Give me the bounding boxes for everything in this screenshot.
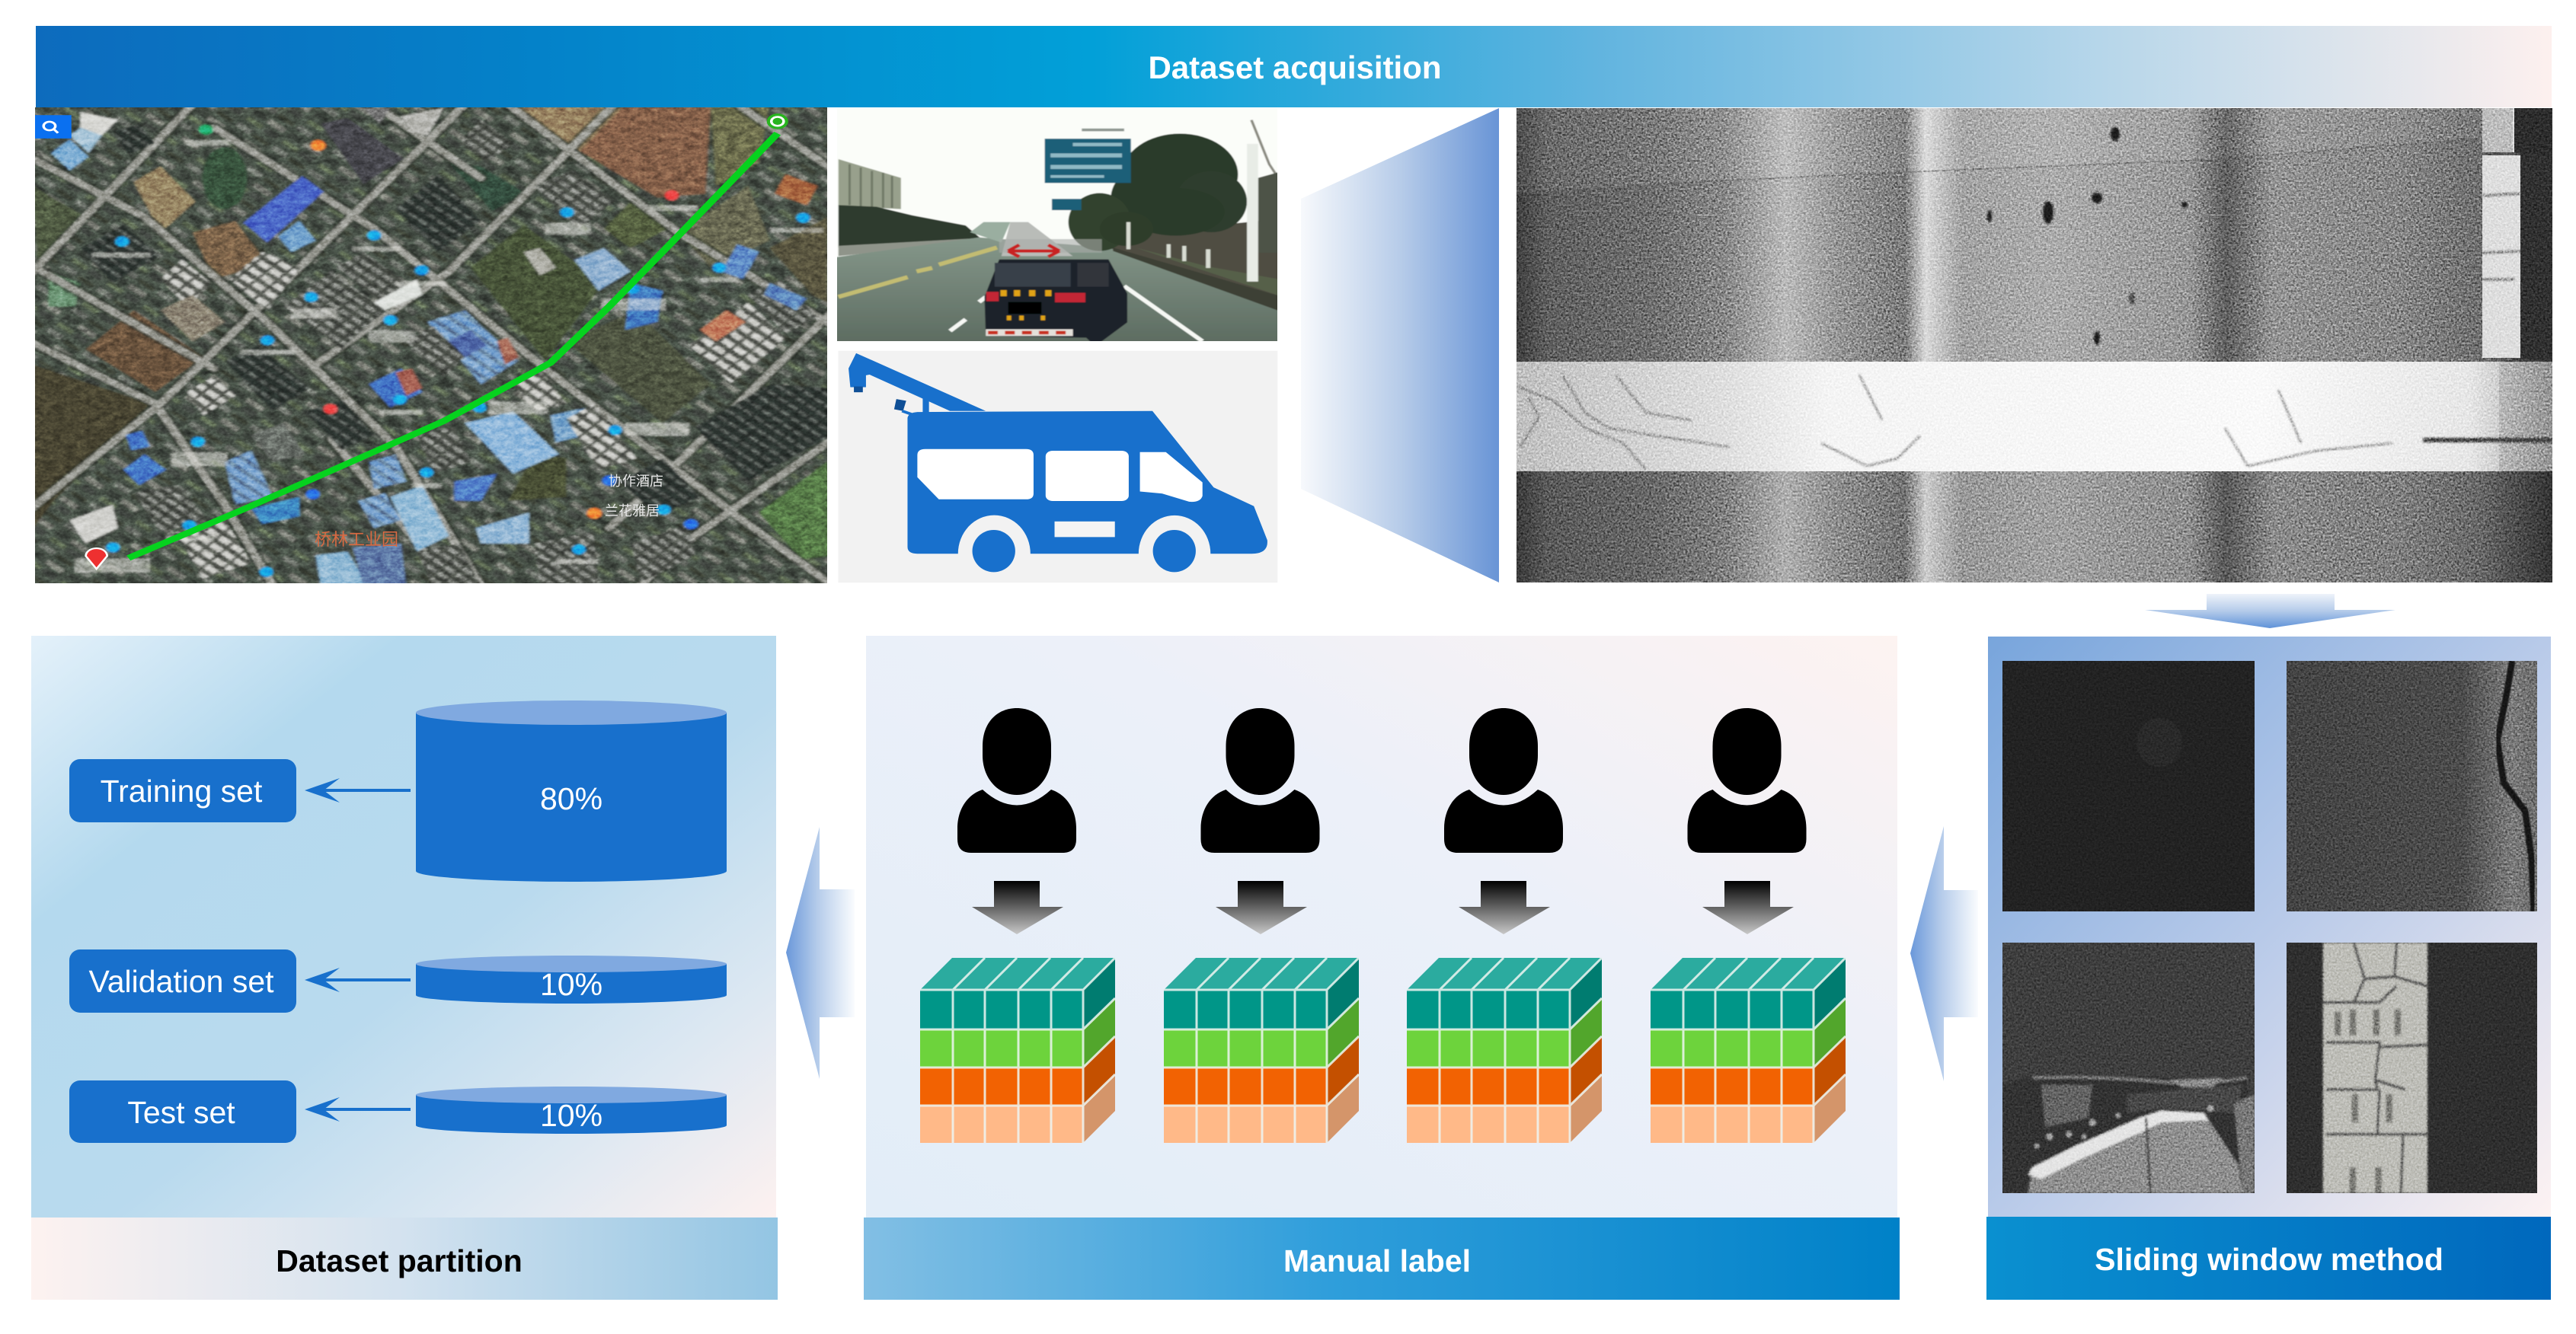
image patch: pavement with crack at right edge xyxy=(2287,661,2537,911)
arrow: to training set xyxy=(305,778,411,803)
annotator 4 with arrow and label cube xyxy=(1651,708,1846,1143)
map place labels: 协作酒店 xyxy=(609,474,663,489)
panel: dataset partition xyxy=(31,636,778,1300)
label: training set: Training set xyxy=(101,774,263,809)
label: validation set xyxy=(69,949,296,1013)
arrow: to validation set xyxy=(305,968,411,992)
image patch: cracked lane marking xyxy=(2287,943,2537,1193)
annotator 3 with arrow and label cube xyxy=(1407,708,1602,1143)
image patch: pothole with broken slab xyxy=(2002,943,2255,1193)
footer: manual label xyxy=(864,1218,1900,1300)
cylinder: 10% test: 10% xyxy=(540,1098,602,1133)
footer: dataset partition xyxy=(31,1218,778,1300)
cylinder: 80% xyxy=(416,701,727,882)
annotator 1 with arrow and label cube xyxy=(920,708,1115,1143)
satellite map with green survey route xyxy=(21,97,844,594)
header bar: dataset acquisition: Dataset acquisition xyxy=(1148,49,1442,85)
panel: sliding window method xyxy=(1986,637,2551,1300)
arrow: manual label to dataset partition xyxy=(786,827,855,1079)
footer: sliding window method: Sliding window method xyxy=(2095,1242,2443,1277)
map place labels: 兰花雅居 xyxy=(605,503,660,519)
label: validation set: Validation set xyxy=(88,964,274,999)
label: test set: Test set xyxy=(127,1095,235,1130)
photo: inspection vehicle on road xyxy=(837,119,1277,341)
map place labels xyxy=(315,474,663,549)
image patch: plain pavement xyxy=(2002,661,2255,911)
funnel projection from vehicle to road image xyxy=(1301,108,1499,582)
annotator 2 with arrow and label cube xyxy=(1164,708,1359,1143)
footer: sliding window method xyxy=(1986,1217,2551,1300)
header bar: dataset acquisition xyxy=(36,26,2552,107)
footer: dataset partition: Dataset partition xyxy=(276,1243,523,1278)
arrow: road image down to sliding window xyxy=(2145,594,2395,628)
icon: blue inspection van xyxy=(838,351,1277,582)
arrow: sliding window to manual label xyxy=(1910,826,1978,1081)
cylinder: 10% test xyxy=(416,1087,727,1134)
arrow: to test set xyxy=(305,1097,411,1122)
label: test set xyxy=(69,1080,296,1143)
panel: manual label xyxy=(864,636,1900,1300)
cylinder: 80%: 80% xyxy=(540,781,602,816)
cylinder: 10% validation: 10% xyxy=(540,967,602,1002)
label: training set xyxy=(69,759,296,822)
cylinder: 10% validation xyxy=(416,956,727,1004)
footer: manual label: Manual label xyxy=(1283,1243,1471,1278)
road surface scan image xyxy=(1517,108,2552,582)
map place labels: 桥林工业园 xyxy=(315,530,398,549)
